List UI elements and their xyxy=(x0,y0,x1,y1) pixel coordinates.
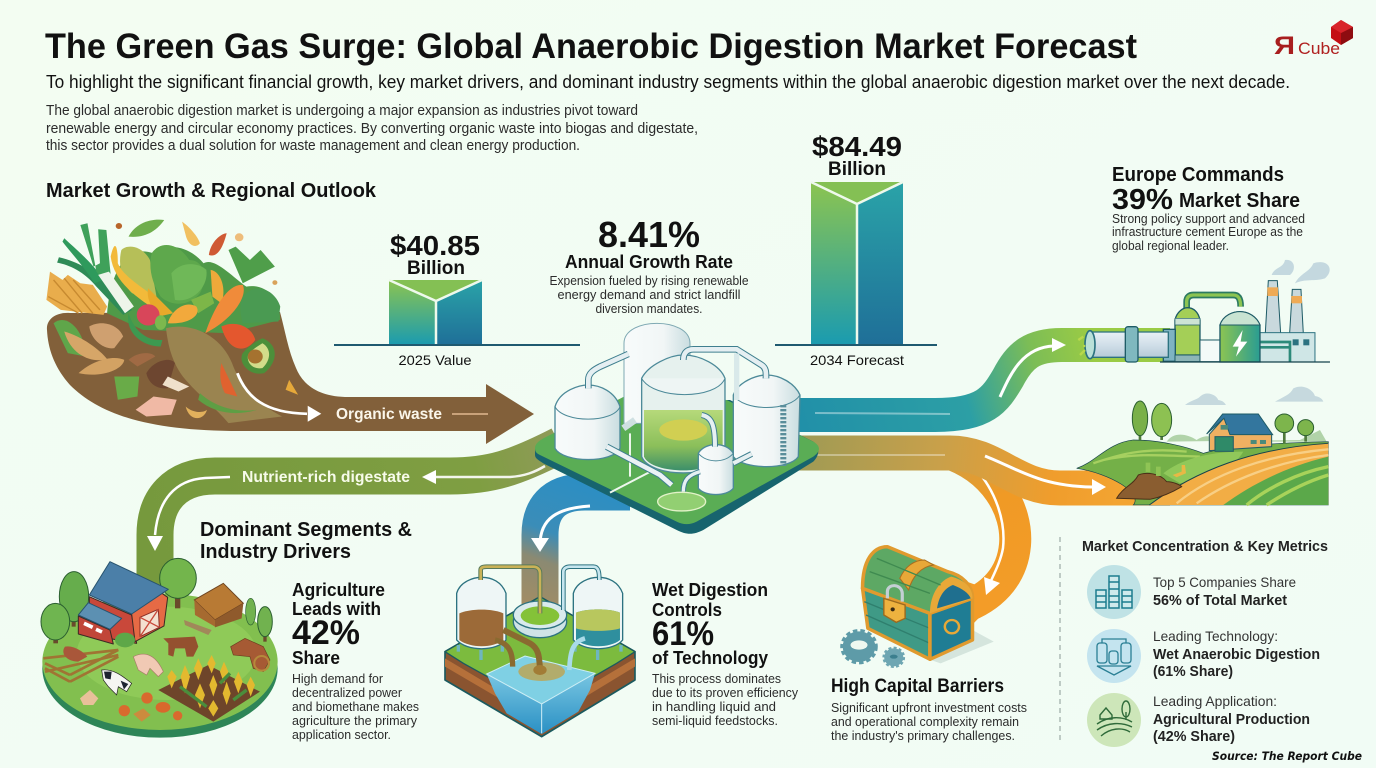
left tank xyxy=(457,577,506,649)
factory xyxy=(1260,333,1315,362)
text block: capital barriers: the industry's primary challenges. xyxy=(831,728,1015,743)
subtitle: To highlight the significant financial growth, key market drivers, and dominant industry segments within the global anaerobic digestion market over the next decade. xyxy=(46,72,1290,92)
metric: leading application: Agricultural Production xyxy=(1153,712,1310,728)
intro text block: renewable energy and circular economy practices. By converting organic waste into biogas and digestate, xyxy=(46,121,698,137)
center basin xyxy=(513,606,567,638)
carrot xyxy=(205,285,244,333)
annual growth rate callout: Expension fueled by rising renewable xyxy=(550,273,748,288)
text block: agriculture: and biomethane makes xyxy=(292,699,419,714)
right tank xyxy=(733,375,800,467)
intro text block: The global anaerobic digestion market is undergoing a major expansion as industries pivot toward xyxy=(46,103,638,119)
trees xyxy=(59,572,89,627)
lettuce xyxy=(120,247,157,300)
icon: company bars xyxy=(1087,565,1141,619)
metric: top 5 companies xyxy=(1153,574,1296,609)
text block: capital barriers: and operational complexity remain xyxy=(831,714,1019,729)
illustration: treasure chest and gears xyxy=(843,547,994,666)
text block: agriculture: application sector. xyxy=(292,727,391,742)
logo: RCube xyxy=(1274,20,1353,60)
intro text block: this sector provides a dual solution for waste management and clean energy production. xyxy=(46,138,580,154)
back bushes xyxy=(1167,430,1327,442)
flying scraps xyxy=(129,220,164,237)
chimneys xyxy=(1265,281,1281,333)
small veg xyxy=(168,304,198,323)
green strips xyxy=(1223,457,1328,505)
text block: agriculture: Leads with xyxy=(292,598,381,619)
water pool xyxy=(487,656,595,734)
back tank xyxy=(624,323,690,423)
text block: wet digestion: Wet Digestion xyxy=(652,579,768,600)
metric: leading technology: Leading Technology: xyxy=(1153,628,1278,644)
europe callout: Market Share xyxy=(1179,190,1300,212)
barn xyxy=(1209,415,1272,451)
illustration: central digester plant xyxy=(535,323,819,534)
river: blue to wet digestion xyxy=(531,492,630,620)
panel: key metrics: Market Concentration & Key Metrics xyxy=(1082,538,1328,555)
tomato xyxy=(221,324,255,349)
battery tank with bolt xyxy=(1220,312,1260,362)
bar chart: 2034 forecast: Billion xyxy=(828,159,886,180)
text block: wet digestion: 61% xyxy=(652,615,714,653)
bar chart: 2025 value xyxy=(334,230,580,368)
metric: leading technology: (61% Share) xyxy=(1153,664,1233,680)
right tank xyxy=(573,577,623,649)
cabin xyxy=(194,583,243,620)
text block: capital barriers: Significant upfront investment costs xyxy=(831,700,1027,715)
metric: leading application: Leading Application: xyxy=(1153,693,1277,709)
small tank xyxy=(698,445,733,495)
avocado xyxy=(241,338,275,374)
text block: agriculture: agriculture the primary xyxy=(292,713,417,728)
metric: leading application: (42% Share) xyxy=(1153,729,1235,745)
heading: market growth: Market Growth & Regional Outlook xyxy=(46,180,377,202)
smoke xyxy=(1272,260,1330,283)
connection pipe xyxy=(1187,295,1241,308)
europe callout: Strong policy support and advanced xyxy=(1112,212,1305,226)
chest front xyxy=(863,588,930,659)
bar chart: 2025 value: Billion xyxy=(407,258,465,279)
europe callout: 39% xyxy=(1112,184,1173,216)
orange field xyxy=(1149,443,1328,505)
illustration: farm disc xyxy=(41,558,278,738)
orange bits xyxy=(220,363,237,396)
barn xyxy=(78,562,168,644)
bar chart: 2034 forecast xyxy=(775,131,937,368)
bar chart: 2034 forecast: $84.49 xyxy=(812,131,902,162)
left tank xyxy=(555,385,620,460)
white arrow xyxy=(237,373,307,414)
main pipe xyxy=(1091,332,1168,357)
text block: wet digestion: in handling liquid and xyxy=(652,699,776,714)
title: The Green Gas Surge: Global Anaerobic Digestion Market Forecast xyxy=(45,26,1137,66)
green onion xyxy=(57,257,132,315)
potatoes xyxy=(64,332,107,360)
heading: dominant segments: Dominant Segments & xyxy=(200,519,412,541)
illustration: wet digestion unit xyxy=(445,567,635,737)
europe callout xyxy=(1112,164,1305,253)
annual growth rate callout: 8.41% xyxy=(598,214,700,255)
platform xyxy=(535,400,818,534)
text block: capital barriers: High Capital Barriers xyxy=(831,675,1004,697)
source note: Source: The Report Cube xyxy=(1212,749,1362,763)
clouds xyxy=(1185,387,1323,405)
wheat xyxy=(46,272,107,315)
river: nutrient-rich digestate xyxy=(147,445,560,590)
green tank xyxy=(1175,308,1200,355)
illustration: farm fields xyxy=(1077,387,1328,505)
metric: leading technology xyxy=(1153,628,1320,680)
metric: leading technology: Wet Anaerobic Digestion xyxy=(1153,647,1320,663)
dark greens xyxy=(240,289,280,323)
lid xyxy=(863,547,972,613)
trees xyxy=(1132,401,1148,440)
text block: agriculture: High demand for xyxy=(292,671,384,686)
padlock xyxy=(887,586,902,602)
metric: top 5 companies: 56% of Total Market xyxy=(1153,593,1287,609)
mushroom xyxy=(146,360,175,388)
metric: top 5 companies: Top 5 Companies Share xyxy=(1153,574,1296,590)
animals xyxy=(63,646,87,662)
logo: RCube: Cube xyxy=(1298,39,1340,58)
backing mass of greens xyxy=(107,247,280,333)
text block: agriculture: Agriculture xyxy=(292,579,385,600)
annual growth rate callout xyxy=(550,214,748,316)
back hills xyxy=(1077,440,1328,505)
annual growth rate callout: diversion mandates. xyxy=(596,301,702,316)
bar chart: 2025 value: $40.85 xyxy=(390,230,480,261)
chest side xyxy=(930,598,972,659)
text block: agriculture xyxy=(292,579,419,742)
pipes xyxy=(481,567,540,613)
crop field xyxy=(158,665,260,722)
metric: leading application xyxy=(1153,693,1310,745)
heading: dominant segments: Industry Drivers xyxy=(200,541,351,563)
produce xyxy=(80,690,98,705)
text block: wet digestion: Controls xyxy=(652,599,722,620)
logo: RCube: Я xyxy=(1274,32,1295,60)
icon: digester tanks xyxy=(1087,629,1141,683)
puddle xyxy=(658,492,706,511)
text block: capital barriers xyxy=(831,675,1027,743)
icon: fields xyxy=(1087,693,1141,747)
text block: agriculture: Share xyxy=(292,647,340,668)
annual growth rate callout: Annual Growth Rate xyxy=(565,251,733,272)
intro text block xyxy=(46,103,698,154)
ground line xyxy=(1160,360,1330,364)
soil block xyxy=(445,597,635,737)
illustration: organic waste pile and arrow xyxy=(46,220,534,444)
text block: wet digestion: of Technology xyxy=(652,647,769,668)
fence xyxy=(43,650,118,682)
annual growth rate callout: energy demand and strict landfill xyxy=(558,287,741,302)
text block: wet digestion xyxy=(652,579,798,728)
europe callout: Europe Commands xyxy=(1112,164,1284,186)
compost pile xyxy=(1117,473,1182,499)
heading: dominant segments xyxy=(200,519,412,563)
bar chart: 2025 value: 2025 Value xyxy=(398,352,472,368)
europe callout: global regional leader. xyxy=(1112,239,1229,253)
gears xyxy=(843,631,875,662)
label: organic waste: Organic waste xyxy=(336,406,442,423)
label: nutrient-rich digestate: Nutrient-rich digestate xyxy=(242,469,410,486)
panel: key metrics xyxy=(1082,538,1328,747)
illustration: biogas plant xyxy=(1078,260,1330,362)
shadow xyxy=(926,630,994,663)
center tank xyxy=(642,355,725,473)
meat xyxy=(136,396,177,416)
river: orange branch to treasure chest xyxy=(945,452,1015,625)
river: teal to plant xyxy=(790,338,1170,415)
river: orange to fields xyxy=(785,453,1170,495)
europe callout: infrastructure cement Europe as the xyxy=(1112,225,1303,239)
text block: wet digestion: semi-liquid feedstocks. xyxy=(652,713,778,728)
text block: wet digestion: This process dominates xyxy=(652,671,781,686)
text block: agriculture: 42% xyxy=(292,614,360,652)
text block: agriculture: decentralized power xyxy=(292,685,403,700)
pipes xyxy=(588,354,628,388)
bar chart: 2034 forecast: 2034 Forecast xyxy=(810,352,904,368)
text block: wet digestion: due to its proven efficiency xyxy=(652,685,798,700)
disc xyxy=(42,599,278,738)
